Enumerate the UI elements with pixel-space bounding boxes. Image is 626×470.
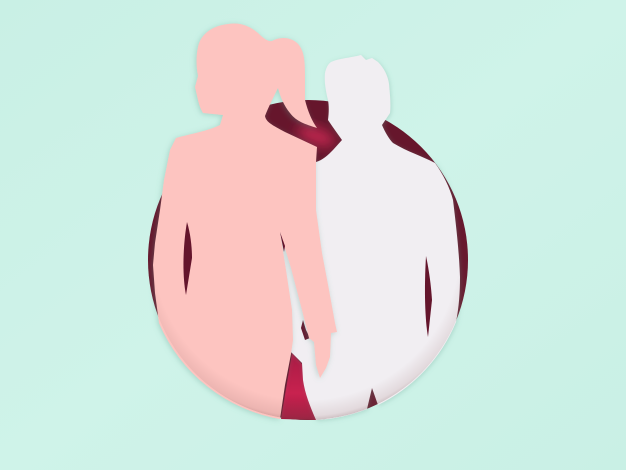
- sliver beside the woman's arm: [280, 232, 285, 252]
- small dark gap near the hand: [301, 320, 310, 340]
- woman silhouette in pink paper: [153, 23, 337, 419]
- paper-cut illustration of a couple in a circular opening: [148, 22, 468, 422]
- man arm slit: [425, 256, 432, 337]
- crimson wedge at the bottom: [281, 353, 316, 420]
- crimson glow behind the figures: [294, 122, 338, 150]
- circular maroon opening: [148, 100, 468, 420]
- man silhouette in white paper: [278, 55, 460, 420]
- woman arm slit: [183, 222, 192, 295]
- soft shadow along the lower rim of the opening: [158, 292, 460, 420]
